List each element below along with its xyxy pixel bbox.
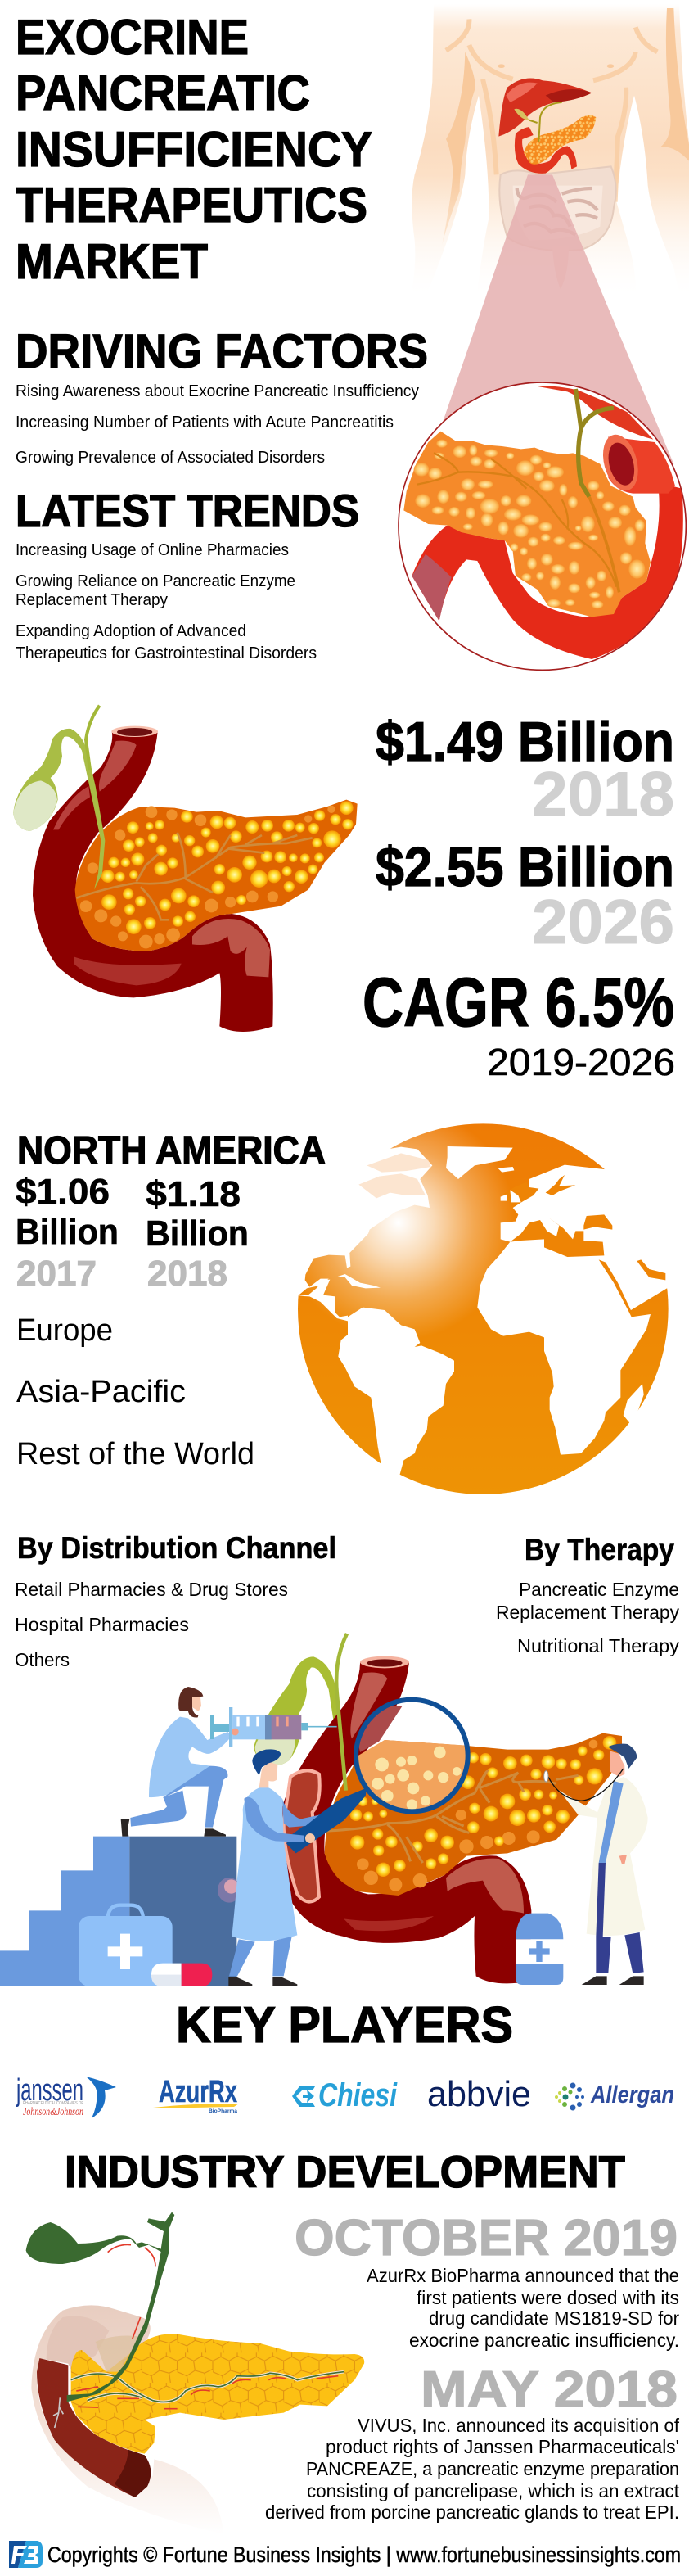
October 2019 development bbox=[295, 2210, 679, 2351]
latest trends list bbox=[16, 541, 317, 662]
inner stomach bbox=[284, 1770, 320, 1902]
Mediterranean and seas bbox=[501, 1175, 665, 1312]
logo: Chiesi: Chiesi bbox=[318, 2077, 398, 2113]
north america block bbox=[16, 1129, 326, 1294]
May 2018 development: product rights of Janssen Pharmaceuticals' bbox=[326, 2436, 679, 2457]
body illustration bbox=[401, 4, 689, 464]
by distribution channel bbox=[15, 1531, 336, 1670]
gallbladder and bile duct bbox=[26, 2212, 174, 2402]
lumpy pancreas bbox=[75, 800, 358, 951]
medical bag bbox=[79, 1905, 173, 1986]
driving factors list: Increasing Number of Patients with Acute Pancreatitis bbox=[16, 414, 394, 432]
yellow pancreas bbox=[71, 2334, 364, 2454]
other regions: Rest of the World bbox=[16, 1437, 254, 1471]
small bile duct bbox=[529, 102, 562, 142]
May 2018 development: VIVUS, Inc. announced its acquisition of bbox=[358, 2415, 680, 2436]
by distribution channel: Retail Pharmacies & Drug Stores bbox=[15, 1579, 288, 1600]
by distribution channel: Hospital Pharmacies bbox=[15, 1614, 189, 1635]
north america block: 2017 bbox=[16, 1254, 97, 1294]
by distribution channel: Others bbox=[15, 1649, 70, 1670]
logo: janssen: Johnson&Johnson bbox=[23, 2106, 83, 2118]
market values: 2018 bbox=[532, 760, 674, 829]
Eurasia and Africa bbox=[477, 1165, 689, 1455]
digestive anatomy illustration bbox=[26, 2212, 364, 2534]
zoom circle: pancreas detail bbox=[399, 382, 686, 670]
syringe bbox=[210, 1707, 337, 1747]
north america block: Billion bbox=[16, 1212, 119, 1252]
driving factors heading: DRIVING FACTORS bbox=[16, 325, 428, 378]
other regions bbox=[16, 1313, 254, 1471]
key players heading: KEY PLAYERS bbox=[176, 1997, 513, 2054]
globe bbox=[281, 1123, 689, 1494]
doctor with syringe bbox=[121, 1687, 337, 1837]
May 2018 development: MAY 2018 bbox=[421, 2361, 678, 2418]
stairs bbox=[0, 1837, 241, 1986]
logo: Allergan bbox=[555, 2081, 674, 2111]
latest trends heading: LATEST TRENDS bbox=[16, 485, 359, 536]
by therapy: Nutritional Therapy bbox=[517, 1635, 679, 1656]
logo: AzurRx: AzurRx bbox=[159, 2075, 237, 2109]
small pancreas bbox=[524, 115, 596, 165]
logo: Chiesi bbox=[292, 2077, 398, 2113]
October 2019 development: drug candidate MS1819-SD for bbox=[429, 2307, 679, 2329]
pancreatic ducts bbox=[76, 833, 313, 920]
gallbladder bbox=[254, 1656, 344, 1765]
by therapy: By Therapy bbox=[525, 1533, 674, 1566]
latest trends list: Increasing Usage of Online Pharmacies bbox=[16, 541, 289, 559]
industry development heading: INDUSTRY DEVELOPMENT bbox=[65, 2146, 625, 2197]
duodenum bbox=[33, 726, 273, 1032]
red flow arrows bbox=[76, 2244, 338, 2409]
title bbox=[16, 10, 372, 289]
October 2019 development: first patients were dosed with its bbox=[417, 2287, 679, 2308]
magnifier bbox=[286, 1700, 468, 1853]
latest trends list: Expanding Adoption of Advanced bbox=[16, 622, 246, 640]
bile duct bbox=[336, 1634, 347, 1791]
footer logo bbox=[9, 2541, 43, 2568]
small duodenum bbox=[515, 127, 577, 174]
pancreatic ducts bbox=[319, 1771, 579, 1863]
latest trends list: Growing Reliance on Pancreatic Enzyme bbox=[16, 572, 295, 590]
May 2018 development: derived from porcine pancreatic glands to treat EPI. bbox=[265, 2501, 679, 2523]
by therapy bbox=[496, 1533, 679, 1656]
cone bbox=[428, 174, 673, 464]
title: EXOCRINE bbox=[16, 10, 249, 65]
doctors and pancreas scene bbox=[0, 1634, 648, 1986]
title: MARKET bbox=[16, 234, 208, 289]
logo: Allergan: Allergan bbox=[590, 2081, 674, 2108]
medicine bottle bbox=[516, 1914, 563, 1985]
title: INSUFFICIENCY bbox=[16, 122, 372, 177]
logo: AzurRx bbox=[153, 2075, 239, 2114]
October 2019 development: OCTOBER 2019 bbox=[295, 2210, 678, 2266]
title: PANCREATIC bbox=[16, 66, 310, 120]
duodenum wall bbox=[31, 2305, 223, 2534]
pancreas illustration bbox=[13, 706, 358, 1032]
driving factors list: Growing Prevalence of Associated Disorders bbox=[16, 449, 325, 467]
logo: abbvie: abbvie bbox=[427, 2074, 531, 2114]
duodenum interior bbox=[37, 2358, 151, 2497]
north america block: $1.18 bbox=[146, 1174, 241, 1214]
May 2018 development bbox=[265, 2361, 680, 2523]
Americas bbox=[281, 1146, 514, 1480]
October 2019 development: exocrine pancreatic insufficiency. bbox=[409, 2330, 679, 2351]
intestines bbox=[499, 166, 616, 289]
market values: 2019-2026 bbox=[487, 1041, 675, 1083]
logo: AzurRx: BioPharma bbox=[209, 2109, 238, 2114]
by therapy: Replacement Therapy bbox=[496, 1602, 679, 1623]
other regions: Europe bbox=[16, 1313, 113, 1348]
logo: janssen: janssen bbox=[16, 2073, 83, 2108]
market values: 2026 bbox=[532, 888, 674, 957]
October 2019 development: AzurRx BioPharma announced that the bbox=[367, 2265, 679, 2286]
lumpy pancreas bbox=[325, 1733, 622, 1896]
north america block: 2018 bbox=[147, 1254, 227, 1294]
other regions: Asia-Pacific bbox=[16, 1375, 186, 1409]
driving factors list: Rising Awareness about Exocrine Pancreatic Insufficiency bbox=[16, 382, 419, 400]
by therapy: Pancreatic Enzyme bbox=[519, 1579, 679, 1600]
north america block: $1.06 bbox=[16, 1172, 110, 1212]
north america block: Billion bbox=[146, 1213, 249, 1254]
pancreatic duct bbox=[71, 2372, 344, 2402]
latest trends list: Replacement Therapy bbox=[16, 591, 168, 609]
title: THERAPEUTICS bbox=[16, 178, 367, 233]
doctor with stethoscope bbox=[544, 1744, 648, 1985]
liver bbox=[498, 79, 592, 137]
logo: janssen: PHARMACEUTICAL COMPANIES OF bbox=[23, 2101, 83, 2106]
pill bbox=[151, 1964, 212, 1986]
gallbladder bbox=[13, 706, 105, 890]
market values bbox=[363, 711, 675, 1083]
by distribution channel: By Distribution Channel bbox=[17, 1531, 336, 1565]
duodenum bbox=[280, 1656, 531, 1983]
latest trends list: Therapeutics for Gastrointestinal Disorders bbox=[16, 644, 317, 662]
doctor with magnifier bbox=[228, 1749, 319, 1986]
driving factors list bbox=[16, 382, 419, 467]
north america block: NORTH AMERICA bbox=[17, 1129, 326, 1173]
May 2018 development: consisting of pancrelipase, which is an extract bbox=[307, 2480, 680, 2501]
